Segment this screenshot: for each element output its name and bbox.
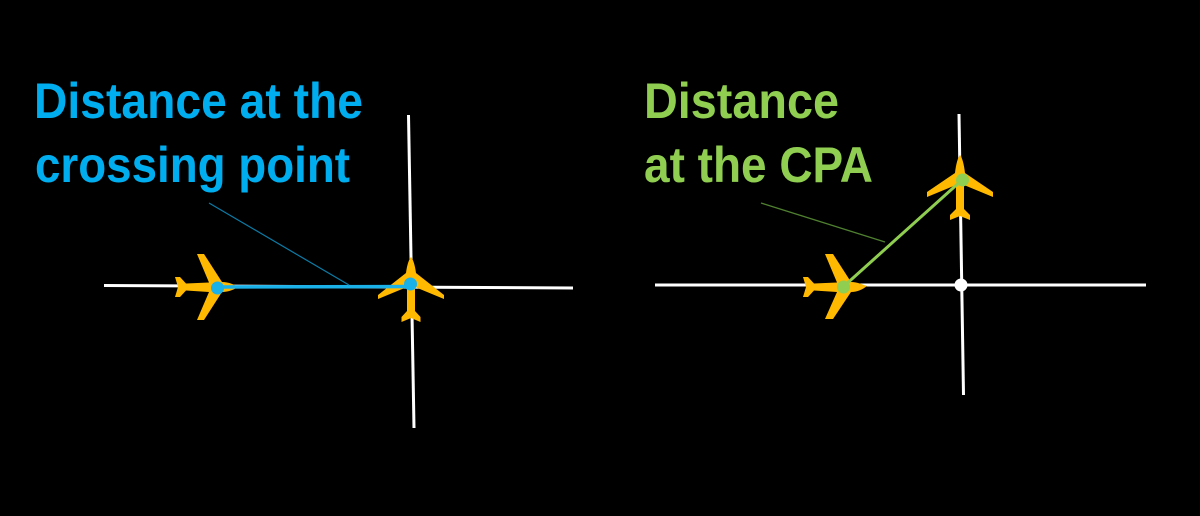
- marker: northbound airplane position: [404, 278, 417, 290]
- heading: distance at the CPA: at the CPA: [644, 137, 873, 193]
- distance line at the crossing point: [217, 285, 411, 289]
- icon: eastbound airplane: [803, 254, 867, 319]
- heading: distance at the crossing point: [34, 73, 363, 193]
- marker: eastbound airplane position: [211, 282, 224, 294]
- panel: distance at the crossing point: [34, 73, 573, 428]
- leader line to heading: [761, 203, 885, 242]
- vertical flight path: [959, 114, 964, 395]
- icon: eastbound airplane: [175, 254, 238, 320]
- heading: distance at the CPA: Distance: [644, 73, 839, 129]
- horizontal flight path: [655, 284, 1146, 286]
- leader line to heading: [209, 203, 349, 285]
- icon: northbound airplane: [927, 155, 993, 220]
- heading: distance at the crossing point: crossing point: [35, 137, 350, 193]
- panel: distance at the CPA: [644, 73, 1146, 395]
- distance line at the CPA: [843, 180, 962, 287]
- marker: eastbound airplane position: [837, 280, 850, 294]
- vertical flight path: [408, 115, 414, 428]
- icon: northbound airplane: [378, 257, 444, 322]
- horizontal flight path: [104, 286, 573, 288]
- marker: northbound airplane position: [956, 174, 969, 186]
- heading: distance at the CPA: [644, 73, 873, 193]
- heading: distance at the crossing point: Distance at the: [34, 73, 363, 129]
- marker: crossing point: [954, 278, 968, 292]
